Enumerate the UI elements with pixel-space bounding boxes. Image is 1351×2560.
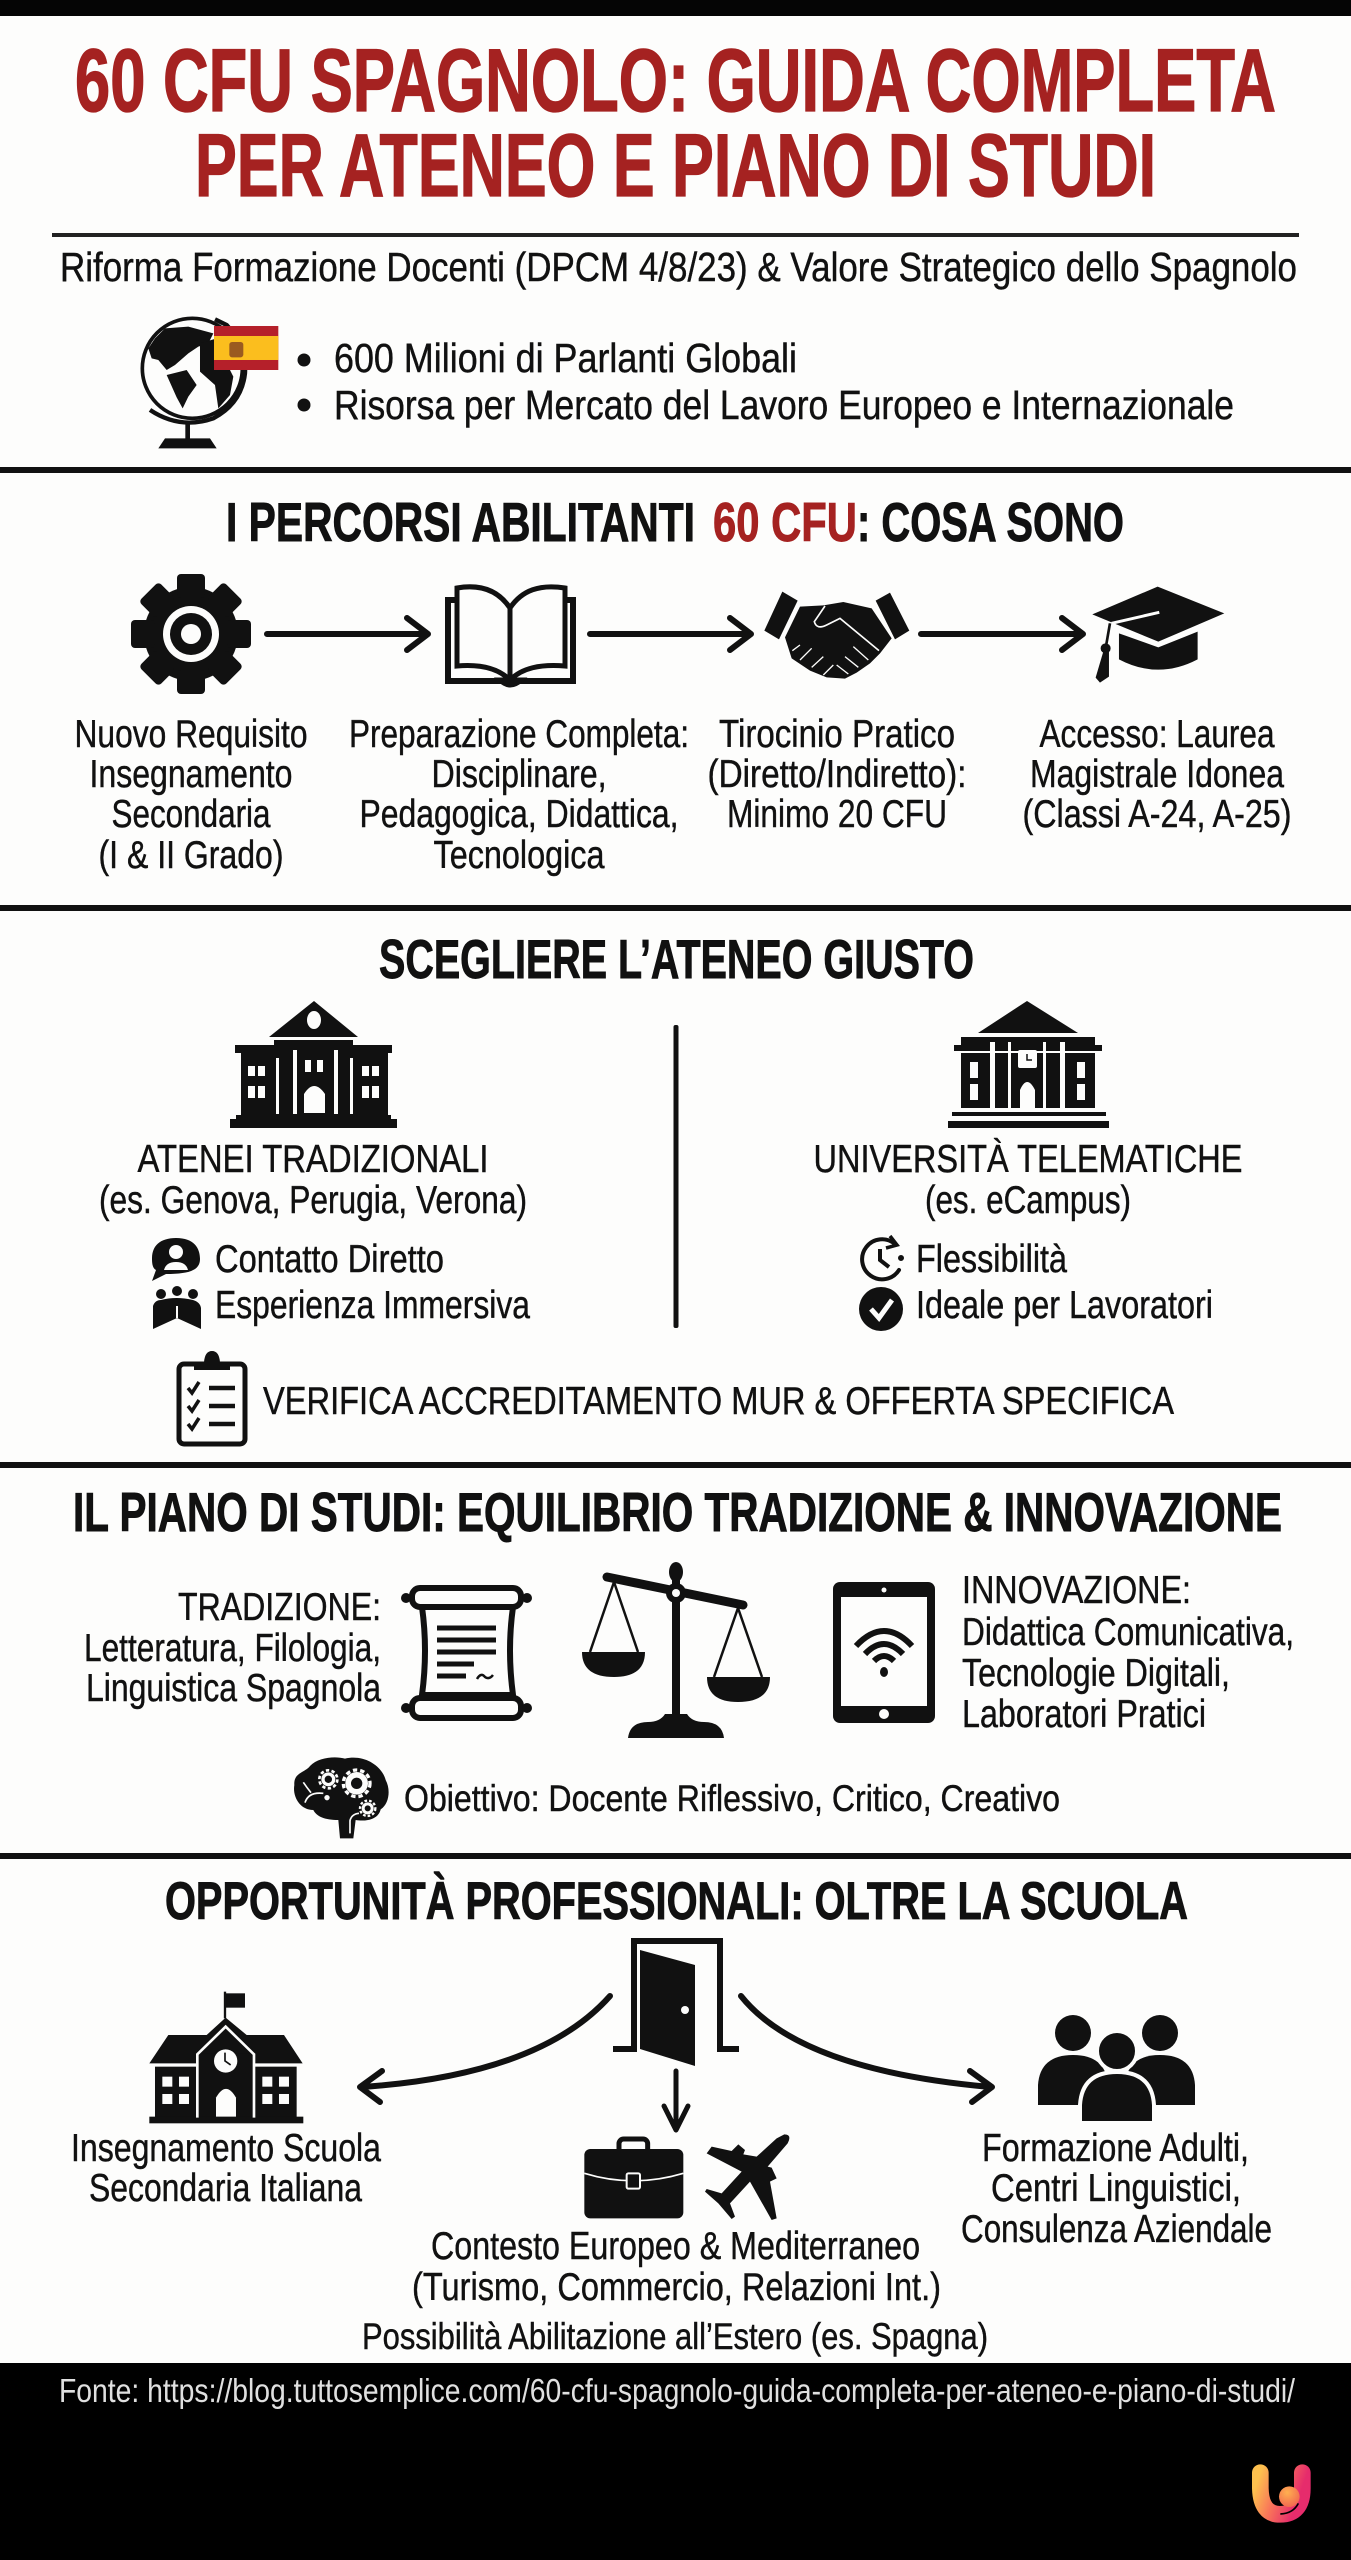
step text: tirocinio: (Diretto/Indiretto): (708, 753, 966, 796)
icon: brain with gears (294, 1757, 389, 1838)
step text: preparazione: Disciplinare, (432, 753, 606, 796)
text: tradizione: TRADIZIONE: (178, 1586, 381, 1629)
step text: accesso (1022, 713, 1292, 836)
icon: open book (448, 587, 573, 685)
arrow: to adult training (741, 1996, 992, 2102)
icon: balance scale (582, 1562, 770, 1738)
text: universita telematiche: UNIVERSITÀ TELEMATICHE (814, 1138, 1242, 1181)
icon: briefcase (584, 2139, 683, 2218)
text: tradizione: Linguistica Spagnola (86, 1667, 381, 1710)
text: formazione adulti: Formazione Adulti, (982, 2127, 1249, 2170)
text: innovazione: Laboratori Pratici (962, 1693, 1206, 1736)
panel: piano di studi (73, 1481, 1294, 1838)
logo (1260, 2473, 1302, 2514)
text: atenei tradizionali (99, 1138, 527, 1222)
text: atenei tradizionali: ATENEI TRADIZIONALI (138, 1138, 488, 1181)
text: innovazione: INNOVAZIONE: (962, 1569, 1191, 1612)
heading: : COSA SONO (857, 491, 1124, 553)
icon: handshake (764, 592, 909, 679)
step text: accesso: (Classi A-24, A-25) (1022, 793, 1292, 836)
arrow: to school (360, 1996, 610, 2102)
step text: preparazione: Tecnologica (434, 834, 605, 877)
divider (674, 1025, 678, 1328)
icon: people group (1038, 2015, 1195, 2123)
text: insegnamento scuola: Secondaria Italiana (89, 2167, 362, 2210)
icon: group with book (153, 1286, 201, 1329)
icon: airplane (705, 2134, 789, 2220)
text: formazione adulti (961, 2127, 1272, 2251)
text: obiettivo: Obiettivo: Docente Riflessivo, Critico, Creativo (404, 1778, 1060, 1819)
step text: requisito: Insegnamento (90, 753, 292, 796)
text: formazione adulti: Consulenza Aziendale (961, 2208, 1272, 2251)
step text: tirocinio: Tirocinio Pratico (719, 713, 955, 756)
step text: requisito: (I & II Grado) (98, 834, 284, 877)
icon: graduation cap (1092, 587, 1224, 683)
icon: checklist clipboard (179, 1351, 245, 1444)
arrow (921, 618, 1083, 650)
title (75, 30, 1276, 215)
step text: preparazione (349, 713, 689, 877)
text: contesto europeo (412, 2225, 941, 2309)
step text: preparazione: Preparazione Completa: (349, 713, 689, 756)
text: verifica accreditamento: VERIFICA ACCREDITAMENTO MUR & OFFERTA SPECIFICA (263, 1380, 1174, 1423)
text: atenei tradizionali: (es. Genova, Perugia, Verona) (99, 1179, 527, 1222)
text: universita telematiche (814, 1138, 1242, 1222)
step text: requisito: Secondaria (112, 793, 271, 836)
text: tradizione: Letteratura, Filologia, (84, 1627, 381, 1670)
text: contesto europeo: (Turismo, Commercio, Relazioni Int.) (412, 2266, 941, 2309)
text: innovazione: Tecnologie Digitali, (962, 1652, 1230, 1695)
text: innovazione (962, 1569, 1294, 1736)
icon: open door (613, 1941, 739, 2066)
text: formazione adulti: Centri Linguistici, (991, 2167, 1241, 2210)
step text: tirocinio: Minimo 20 CFU (727, 793, 947, 836)
icon: school (149, 1992, 303, 2123)
footer (0, 2363, 1351, 2560)
icon: online university building (948, 1001, 1109, 1128)
text: contatto diretto: Contatto Diretto (215, 1238, 444, 1281)
panel: header (52, 30, 1299, 448)
panel: scegliere l'ateneo (99, 928, 1242, 1444)
bullet list (298, 335, 1234, 428)
bullet list: Risorsa per Mercato del Lavoro Europeo e Internazionale (334, 382, 1234, 428)
icon: contact speech bubble (152, 1238, 200, 1281)
arrow (590, 618, 751, 650)
step text: accesso: Magistrale Idonea (1030, 753, 1284, 796)
text: contesto europeo: Contesto Europeo & Mediterraneo (431, 2225, 920, 2268)
text: esperienza immersiva: Esperienza Immersiva (215, 1284, 530, 1327)
icon: gear (131, 574, 251, 694)
bullet list: 600 Milioni di Parlanti Globali (334, 335, 797, 381)
step text: preparazione: Pedagogica, Didattica, (360, 793, 678, 836)
step text: tirocinio (708, 713, 966, 836)
text: tradizione (84, 1586, 381, 1710)
text: flessibilita: Flessibilità (916, 1238, 1067, 1281)
text: universita telematiche: (es. eCampus) (925, 1179, 1131, 1222)
step text: requisito: Nuovo Requisito (74, 713, 308, 756)
heading: SCEGLIERE L’ATENEO GIUSTO (379, 928, 974, 990)
text: insegnamento scuola (71, 2127, 381, 2210)
panel: opportunita professionali (71, 1871, 1272, 2357)
icon: traditional university building (230, 1001, 397, 1128)
step text: requisito (74, 713, 308, 877)
heading: 60 CFU (713, 491, 857, 553)
text: ideale per lavoratori: Ideale per Lavoratori (916, 1284, 1213, 1327)
icon: tablet with wifi (833, 1582, 935, 1723)
icon: globe with Spanish flag (142, 318, 278, 448)
panel: percorsi abilitanti (74, 491, 1292, 877)
icon: check circle (859, 1287, 903, 1331)
arrow (267, 618, 428, 650)
icon: clock flexibility (862, 1236, 902, 1279)
arrow: to Europe (664, 2071, 688, 2130)
heading: I PERCORSI ABILITANTI (226, 491, 695, 553)
text: abilitazione estero: Possibilità Abilitazione all’Estero (es. Spagna) (362, 2316, 988, 2357)
text: insegnamento scuola: Insegnamento Scuola (71, 2127, 381, 2170)
step text: accesso: Accesso: Laurea (1040, 713, 1275, 756)
icon: scroll (401, 1588, 532, 1718)
